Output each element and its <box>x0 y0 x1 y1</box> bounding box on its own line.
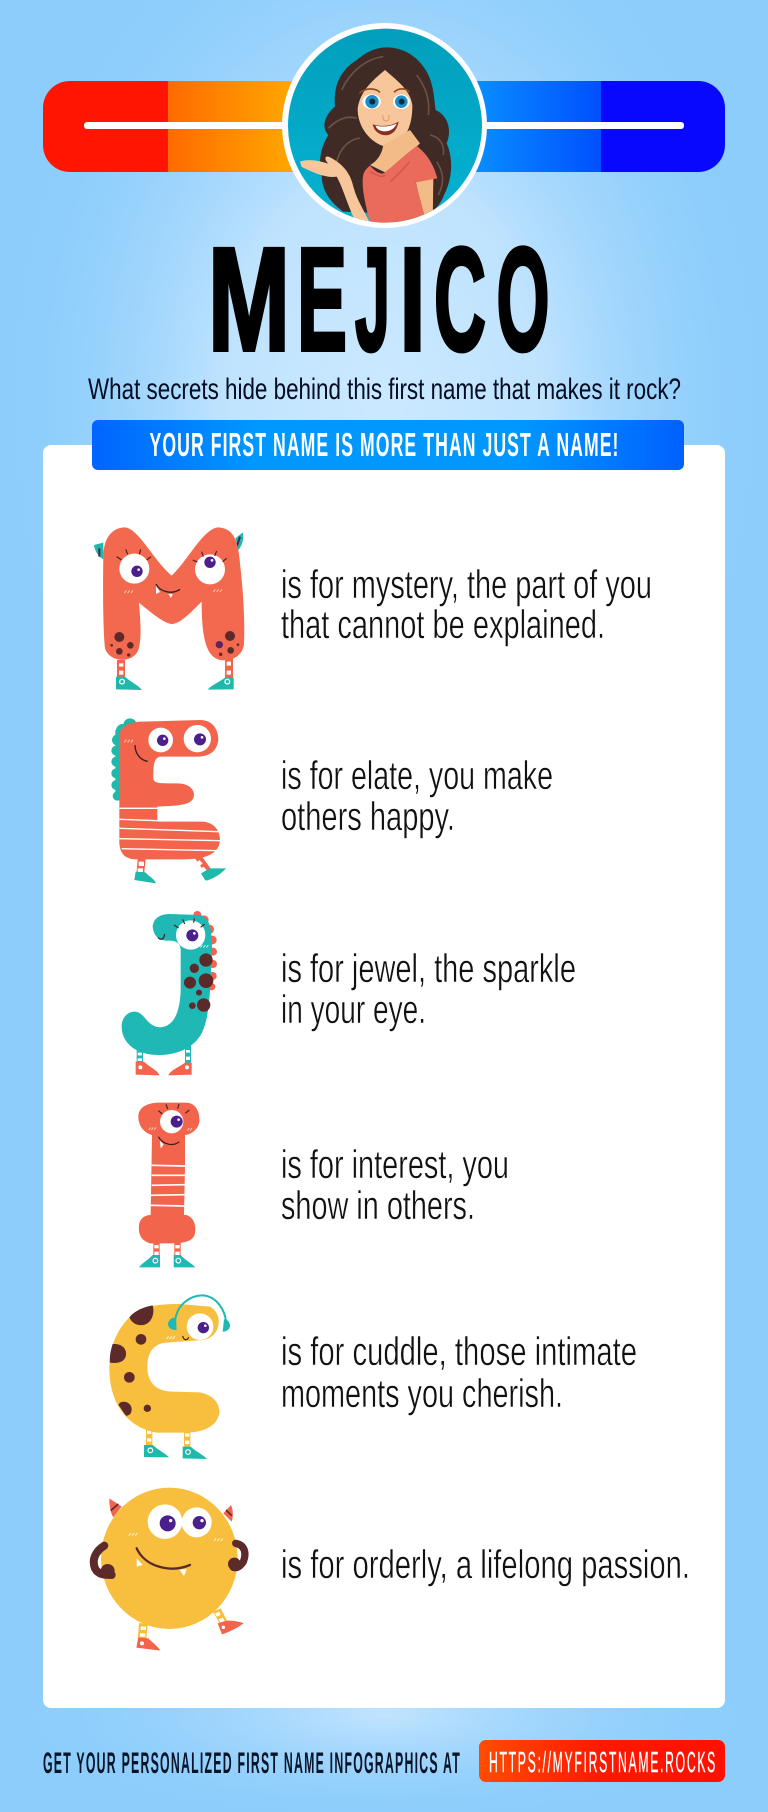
title: E <box>297 218 347 382</box>
letter I text <box>281 1143 509 1228</box>
title <box>208 218 550 382</box>
title: J <box>355 218 390 382</box>
letter M text: that cannot be explained. <box>281 603 605 647</box>
letter I monster <box>138 1103 199 1267</box>
letter E text <box>281 754 553 839</box>
letter J text: in your eye. <box>281 988 426 1032</box>
letter E text: is for elate, you make <box>281 754 553 798</box>
title: C <box>434 218 486 382</box>
title: I <box>400 218 426 382</box>
letter C text: is for cuddle, those intimate <box>281 1330 637 1374</box>
portrait: cartoon woman in circle <box>282 23 487 228</box>
text: O <box>496 218 550 382</box>
letter J text: is for jewel, the sparkle <box>281 947 576 991</box>
footer url button <box>479 1740 725 1782</box>
letter E text: others happy. <box>281 795 455 839</box>
letter I text: is for interest, you <box>281 1143 509 1187</box>
banner <box>92 420 684 470</box>
header gradient bar <box>43 81 725 172</box>
letter I text: show in others. <box>281 1184 475 1228</box>
letter C text <box>281 1330 637 1416</box>
title: M <box>208 218 290 382</box>
letter E monster <box>111 718 226 883</box>
letter M monster <box>94 527 244 690</box>
white content panel <box>43 445 725 1708</box>
letter O monster <box>94 1488 245 1651</box>
letter J text <box>281 947 576 1032</box>
letter C monster <box>109 1295 230 1459</box>
letter C text: moments you cherish. <box>281 1372 563 1416</box>
letter M text <box>281 563 652 647</box>
letter J monster <box>122 911 217 1075</box>
